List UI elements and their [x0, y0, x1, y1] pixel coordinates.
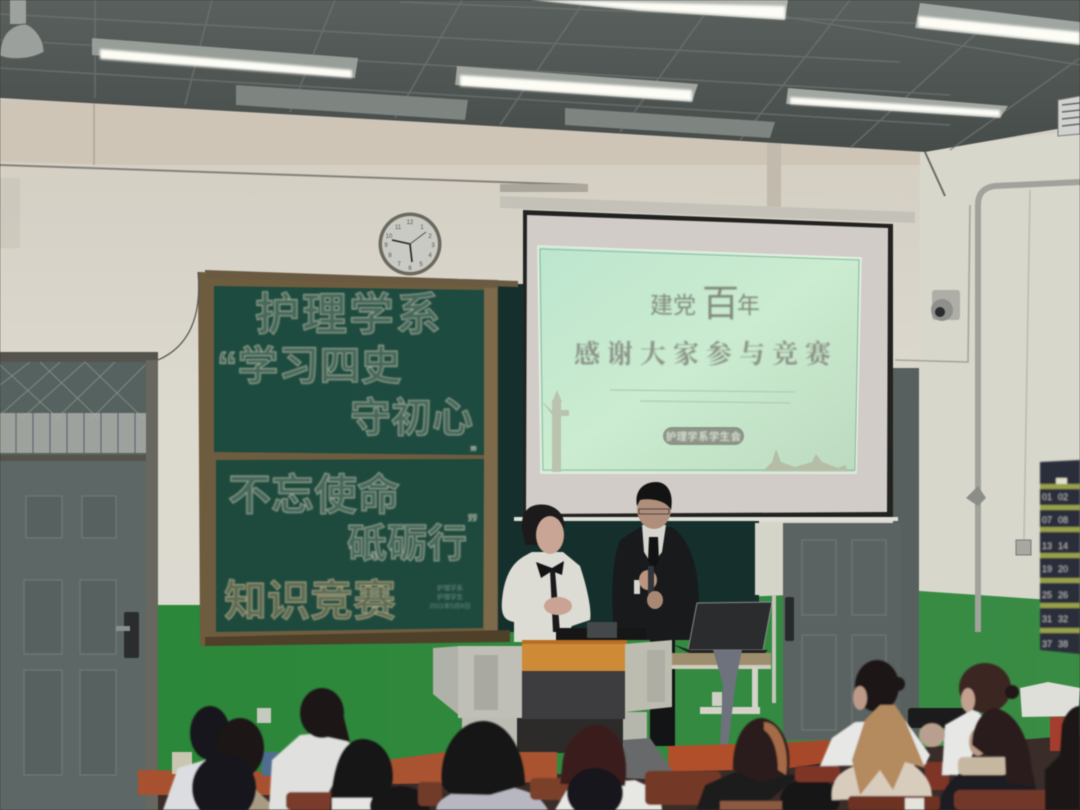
lectern podium	[433, 622, 672, 753]
student far right	[1045, 706, 1080, 810]
wall clock: 9	[384, 243, 388, 249]
chalk headings: 不忘使命	[228, 472, 400, 520]
wall clock: 1	[420, 225, 424, 231]
student left group	[163, 706, 278, 810]
slide title: 百	[702, 283, 739, 324]
green dado wall	[155, 590, 1080, 790]
ceiling with grid tiles	[0, 0, 1080, 152]
chalk headings: 知识竞赛	[224, 578, 396, 626]
slide badge	[663, 427, 744, 445]
chalk headings	[217, 289, 478, 626]
student blonde hair	[795, 705, 949, 800]
chalk headings: 守初心	[350, 395, 473, 441]
chalk signature: 护理学系	[437, 583, 464, 592]
projector screen	[523, 210, 893, 517]
white screen bottom bar	[514, 517, 898, 521]
wall schedule chart: 25	[1042, 590, 1052, 600]
wall clock: 10	[386, 234, 393, 240]
chalk headings: “学习四史	[217, 343, 402, 389]
wall clock: 4	[428, 253, 432, 259]
wall schedule chart: 38	[1058, 639, 1068, 649]
slide	[538, 246, 861, 473]
left door	[0, 352, 158, 810]
student clapping	[919, 663, 1019, 775]
ceiling lights	[92, 0, 1080, 138]
chalk signature: 护理学生	[437, 592, 464, 601]
audience	[163, 660, 1080, 810]
wall schedule chart: 13	[1042, 541, 1052, 551]
wall clock: 5	[419, 262, 423, 268]
wall clock: 7	[397, 262, 401, 268]
wall schedule chart: 37	[1042, 639, 1052, 649]
projector roller	[500, 196, 915, 223]
student tan scarf	[938, 708, 1040, 810]
air vent	[1058, 96, 1080, 136]
laptop on table	[672, 595, 776, 745]
wall clock	[378, 212, 442, 276]
wall schedule chart: 14	[1058, 541, 1068, 551]
chalk headings: 砥砺行	[347, 522, 467, 566]
chalk wire	[158, 272, 199, 360]
wall schedule chart: 08	[1058, 515, 1068, 525]
slide icon: great wall	[763, 449, 848, 471]
chair backs front row	[848, 790, 1050, 810]
wall schedule chart: 31	[1042, 614, 1052, 624]
chalk signature	[429, 583, 471, 610]
wall schedule chart: 32	[1058, 614, 1068, 624]
wall clock: 6	[408, 266, 412, 272]
wall schedule chart: 02	[1058, 492, 1068, 502]
wall clock: 3	[431, 243, 435, 249]
chalk headings: ”	[470, 443, 477, 459]
wall schedule chart: 01	[1042, 492, 1052, 502]
man presenter	[612, 482, 699, 746]
wall schedule chart: 26	[1058, 590, 1068, 600]
slide title: 建党	[650, 292, 696, 318]
curtain	[755, 523, 783, 595]
wall clock: 12	[407, 220, 414, 226]
paper on right desk	[908, 682, 1080, 751]
blackboard	[198, 270, 518, 646]
slide subtitle: 感谢大家参与竞赛	[574, 339, 838, 369]
student white with bun	[820, 660, 930, 766]
woman presenter	[502, 505, 591, 642]
student white shirt	[269, 688, 352, 810]
wall schedule chart: 07	[1042, 515, 1052, 525]
chalk headings: ”	[467, 510, 478, 535]
student dark jacket	[645, 718, 840, 810]
student grey hoodie	[436, 721, 548, 810]
wall clock: 11	[395, 225, 402, 231]
wall pipes	[895, 152, 1080, 632]
dark board behind speakers	[497, 284, 759, 632]
front desks	[138, 708, 830, 795]
chalk signature: 2021年5月8日	[429, 601, 471, 610]
security camera	[931, 290, 960, 321]
chalk headings: 护理学系	[255, 289, 443, 340]
wall schedule chart: 20	[1058, 564, 1068, 574]
slide badge: 护理学系学生会	[666, 430, 741, 443]
dark floor behind audience	[140, 735, 1080, 810]
slide title	[650, 283, 760, 324]
wall schedule chart: 19	[1042, 564, 1052, 574]
slide icon: huabiao column	[541, 390, 569, 472]
wall schedule chart	[1040, 460, 1080, 654]
student long hair	[286, 739, 442, 810]
slide title: 年	[737, 292, 760, 318]
right door	[783, 368, 919, 740]
wall clock: 2	[428, 234, 432, 240]
ceiling lamp top left	[0, 0, 44, 59]
student red hair	[530, 725, 662, 810]
wall clock: 8	[388, 253, 392, 259]
